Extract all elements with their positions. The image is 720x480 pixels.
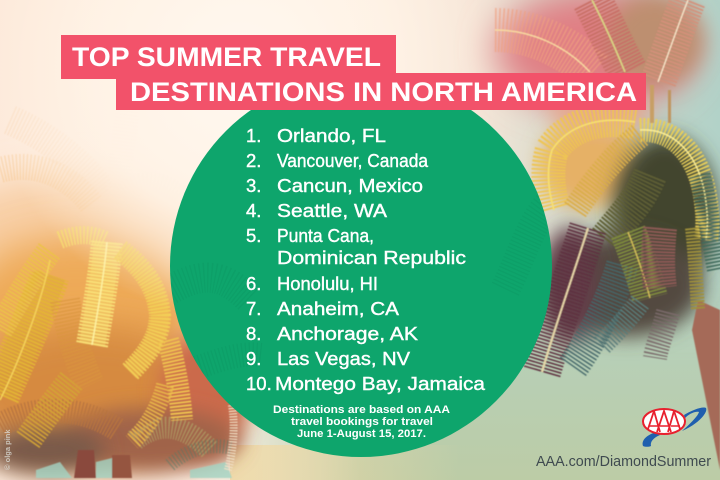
item 3: 3. — [246, 175, 261, 196]
icon: AAA logo — [643, 407, 706, 447]
item 10: 10. — [246, 373, 272, 394]
right palm fronds — [495, 0, 720, 470]
title banner — [61, 35, 646, 110]
sky glow over the left palm — [0, 0, 480, 320]
item 4: 4. — [246, 200, 261, 221]
left palm colour masses — [0, 175, 250, 474]
item 9: Las Vegas, NV — [277, 348, 411, 369]
item 5: 5. — [246, 225, 261, 246]
ranked destination list — [246, 125, 486, 394]
left palm tree — [0, 175, 250, 478]
footnote: June 1-August 15, 2017. — [297, 428, 426, 440]
website URL: AAA.com/DiamondSummer — [536, 453, 711, 470]
item 3: Cancun, Mexico — [277, 175, 423, 196]
photo credit: © olga pink — [3, 429, 12, 470]
footnote — [273, 404, 450, 440]
footnote: Destinations are based on AAA — [273, 404, 450, 416]
left palm fronds — [0, 235, 234, 478]
right palm colour masses — [495, 0, 717, 343]
item 9: 9. — [246, 348, 261, 369]
item 1: Orlando, FL — [277, 125, 386, 146]
item 8: 8. — [246, 323, 261, 344]
item 8: Anchorage, AK — [277, 323, 419, 344]
title line 2: DESTINATIONS IN NORTH AMERICA — [130, 77, 637, 107]
green circle panel — [170, 75, 552, 457]
item 6: 6. — [246, 273, 261, 294]
title line 1: TOP SUMMER TRAVEL — [72, 42, 381, 72]
item 7: 7. — [246, 298, 261, 319]
right palm tree — [495, 0, 720, 470]
item 2: 2. — [246, 150, 261, 171]
item 6: Honolulu, HI — [277, 273, 378, 294]
footnote: travel bookings for travel — [291, 416, 433, 428]
left palm faded top fronds — [0, 60, 180, 205]
item 5: Punta Cana, — [277, 225, 374, 246]
item 2: Vancouver, Canada — [277, 150, 429, 171]
item 7: Anaheim, CA — [277, 298, 400, 319]
item 5: Dominican Republic — [277, 247, 466, 268]
item 4: Seattle, WA — [277, 200, 388, 221]
item 10: Montego Bay, Jamaica — [275, 373, 486, 394]
item 1: 1. — [246, 125, 261, 146]
